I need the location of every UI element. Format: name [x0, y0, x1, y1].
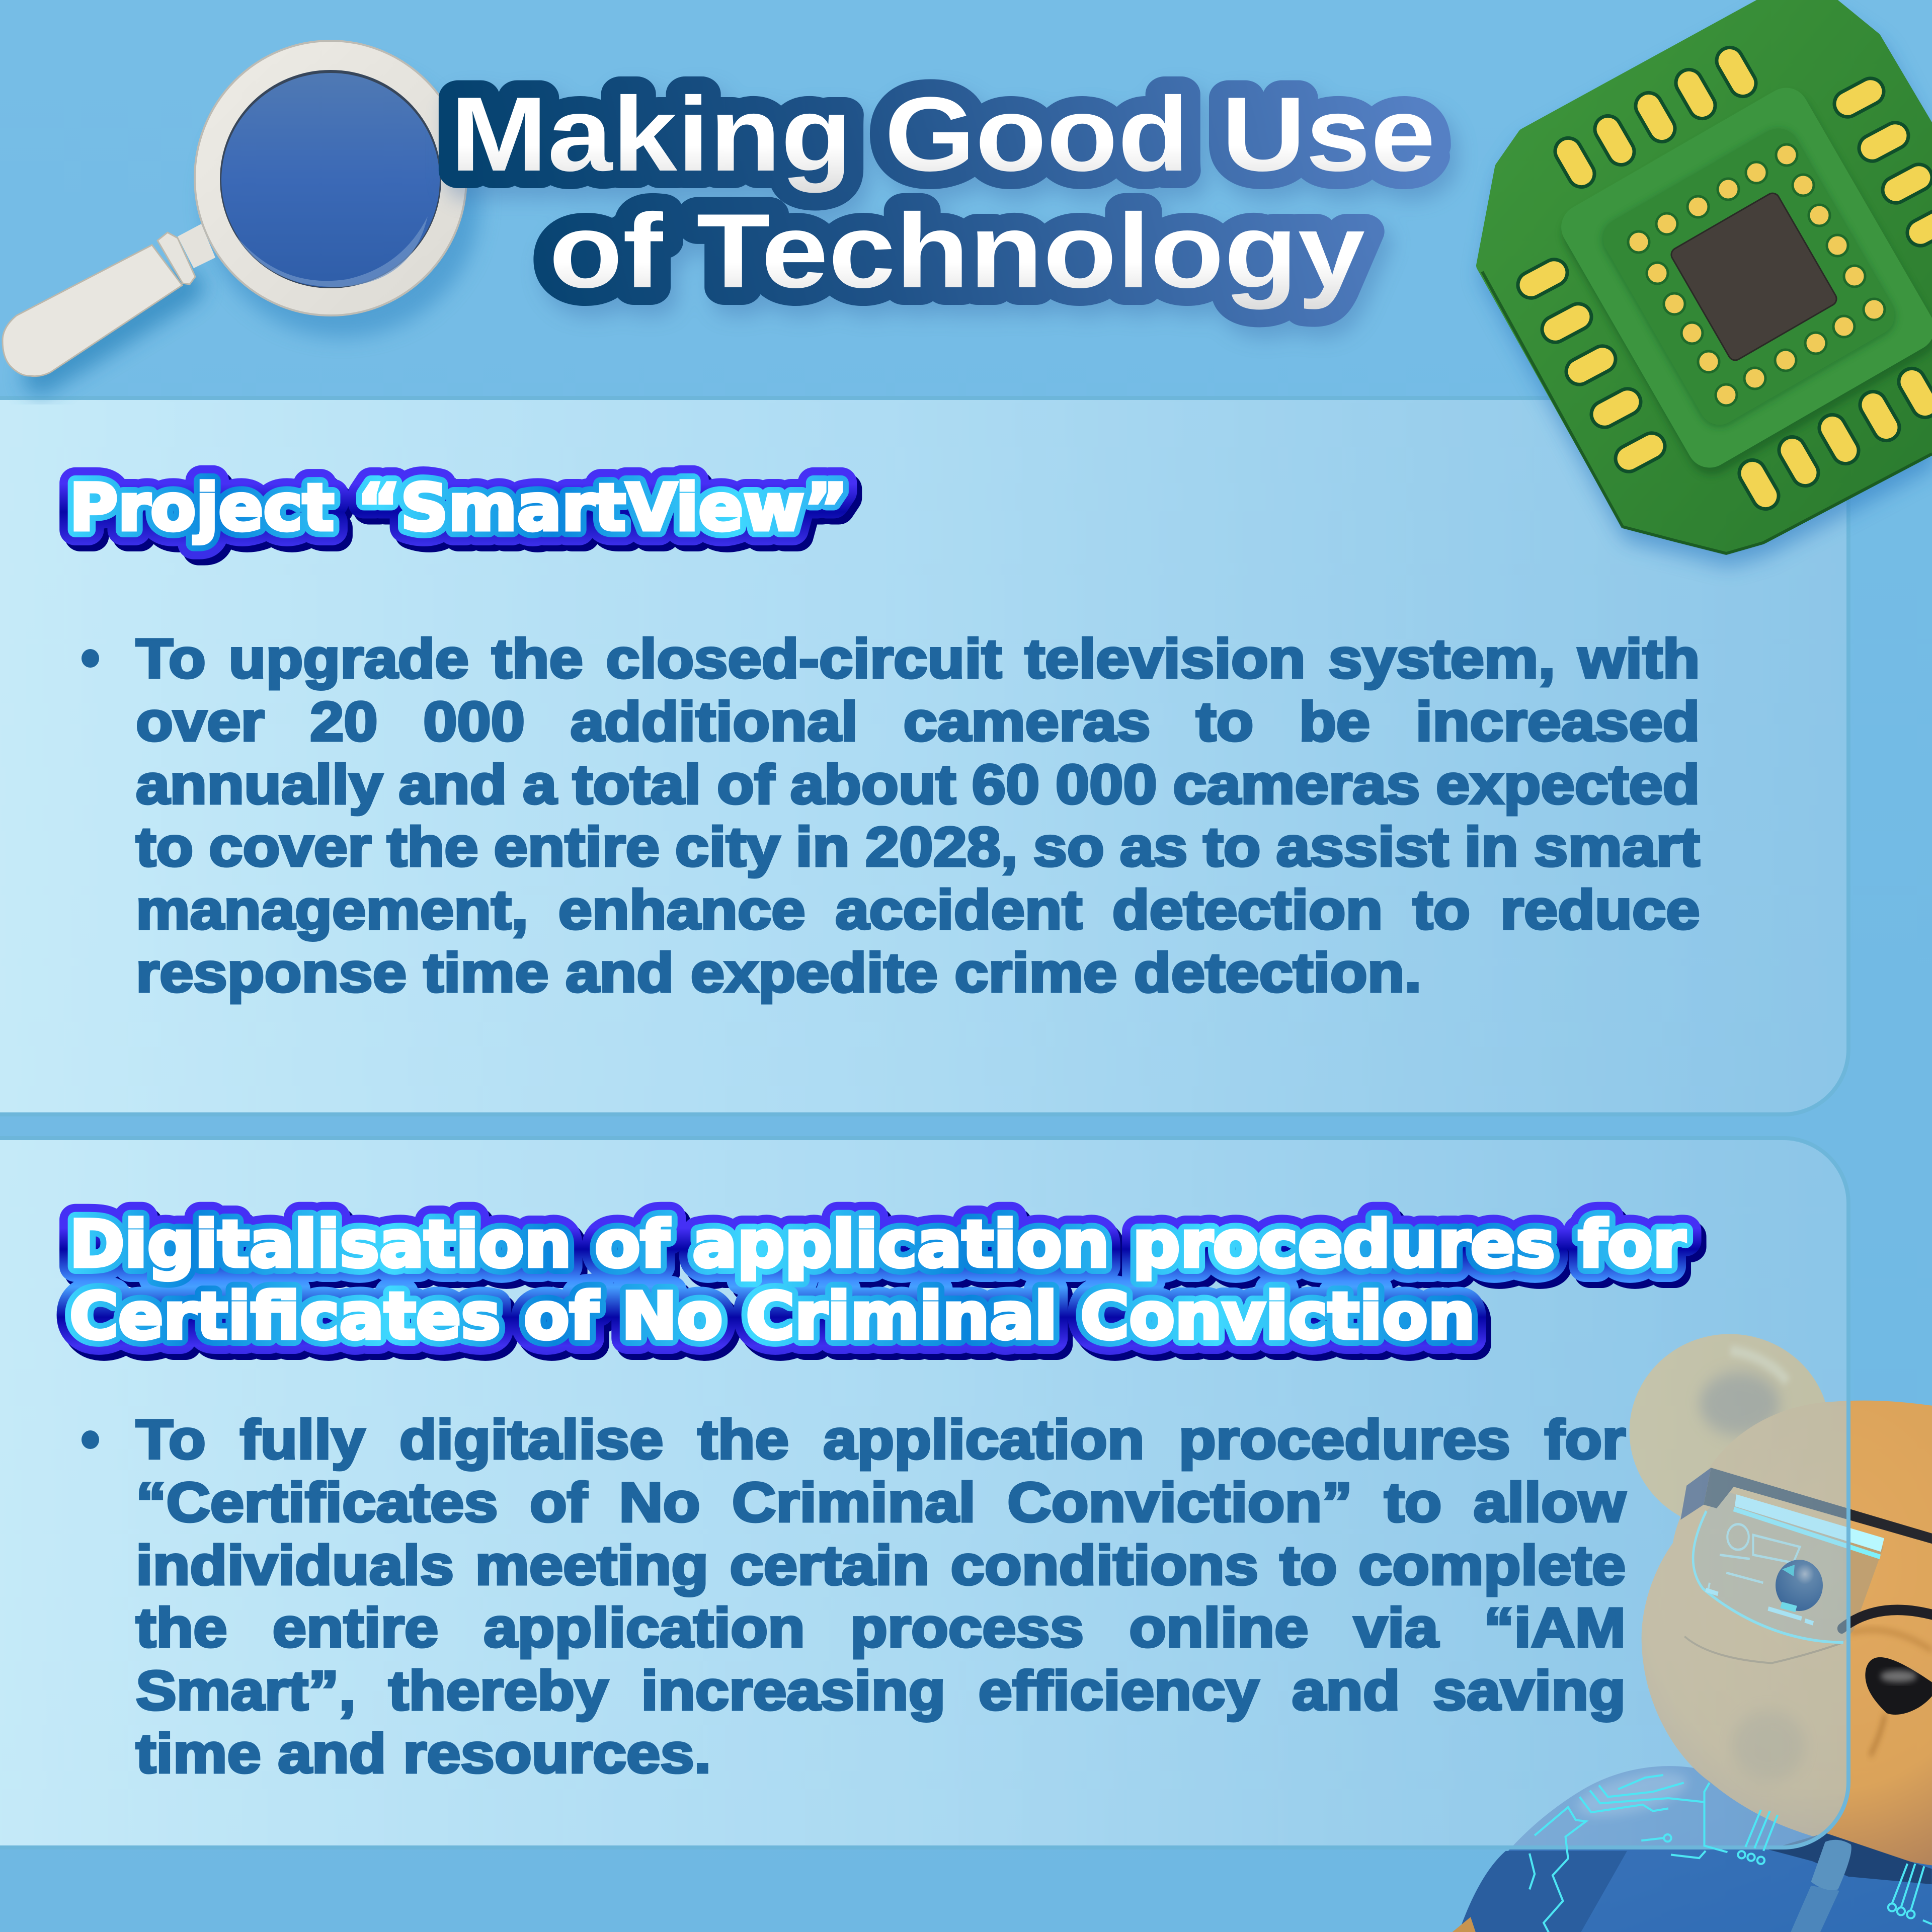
title: of Technology: [549, 192, 1365, 310]
bear eye seen through the smart glasses: [1776, 1560, 1823, 1611]
text block: digitalisation description: the entire application process online via “iAM: [136, 1597, 1626, 1659]
heading: Digitalisation of application procedures: Digitalisation of application procedures for: [74, 1213, 1691, 1288]
text block: SmartView description: management, enhance accident detection to reduce: [136, 879, 1700, 941]
text block: SmartView description: [135, 628, 1701, 1004]
title: Making Good Use: [457, 86, 1442, 204]
heading: Project SmartView: Project “SmartView”: [69, 470, 848, 545]
heading: Digitalisation of application procedures: Certificates of No Criminal Conviction: [69, 1279, 1475, 1354]
heading: Project SmartView: Project “SmartView”: [69, 470, 848, 545]
bear jacket: [1452, 1766, 1932, 1932]
title: of Technology: [556, 203, 1372, 321]
text block: SmartView description: over 20 000 additional cameras to be increased: [136, 691, 1700, 753]
chip pads: [1513, 43, 1932, 514]
text block: digitalisation description: individuals meeting certain conditions to complete: [136, 1535, 1626, 1596]
illustration: bear mascot with smart glasses: [1452, 1334, 1932, 1932]
text block: SmartView description: To upgrade the closed-circuit television system, with: [136, 628, 1700, 690]
icon: magnifying glass: [3, 41, 480, 377]
bullet: digitalisation: [82, 1430, 99, 1449]
bear collar and placket: [1573, 1763, 1932, 1932]
text block: SmartView description: to cover the entire city in 2028, so as to assist in smart: [136, 816, 1700, 878]
text block: SmartView description: annually and a total of about 60 000 cameras expected: [136, 754, 1700, 816]
bullet: SmartView: [82, 649, 99, 668]
heading: Project SmartView: Project “SmartView”: [69, 470, 848, 545]
title: of Technology: [549, 192, 1365, 310]
text block: digitalisation description: “Certificates of No Criminal Conviction” to allow: [136, 1472, 1626, 1534]
bear jacket circuit lines: [1530, 1775, 1932, 1932]
heading: Digitalisation of application procedures: Digitalisation of application procedures for: [69, 1207, 1685, 1282]
chip die: [1669, 191, 1839, 363]
text block: digitalisation description: time and resources.: [136, 1723, 711, 1785]
bear ear: [1630, 1334, 1830, 1529]
title: [450, 75, 1442, 321]
heading: Digitalisation of application procedures: Certificates of No Criminal Conviction: [69, 1279, 1475, 1354]
chip raised frame: [1553, 79, 1932, 483]
text block: digitalisation description: [135, 1409, 1627, 1785]
icon: green microchip: [1480, 3, 1932, 567]
heading: Digitalisation of application procedures: Digitalisation of application procedures for: [69, 1207, 1685, 1282]
panel: Digitalisation of application procedures: [0, 1138, 1848, 1847]
bear head: [1642, 1401, 1932, 1865]
heading: Digitalisation of application procedures: Certificates of No Criminal Conviction: [74, 1285, 1480, 1360]
smart glasses: [1680, 1468, 1932, 1642]
title: Making Good Use: [450, 75, 1435, 193]
text block: digitalisation description: To fully digitalise the application procedures for: [136, 1409, 1626, 1471]
panel: Project SmartView: [0, 398, 1848, 1114]
heading: Digitalisation of application procedures: [69, 1207, 1691, 1360]
heading: Digitalisation of application procedures: Digitalisation of application procedures for: [69, 1207, 1685, 1282]
heading: Project SmartView: Project “SmartView”: [74, 476, 853, 551]
text block: digitalisation description: Smart”, thereby increasing efficiency and saving: [136, 1660, 1626, 1722]
chip contact dots: [1628, 144, 1885, 406]
bear nose: [1865, 1657, 1932, 1715]
title: Making Good Use: [450, 75, 1435, 193]
text block: SmartView description: response time and expedite crime detection.: [136, 942, 1421, 1004]
heading: Digitalisation of application procedures: Certificates of No Criminal Conviction: [69, 1279, 1475, 1354]
